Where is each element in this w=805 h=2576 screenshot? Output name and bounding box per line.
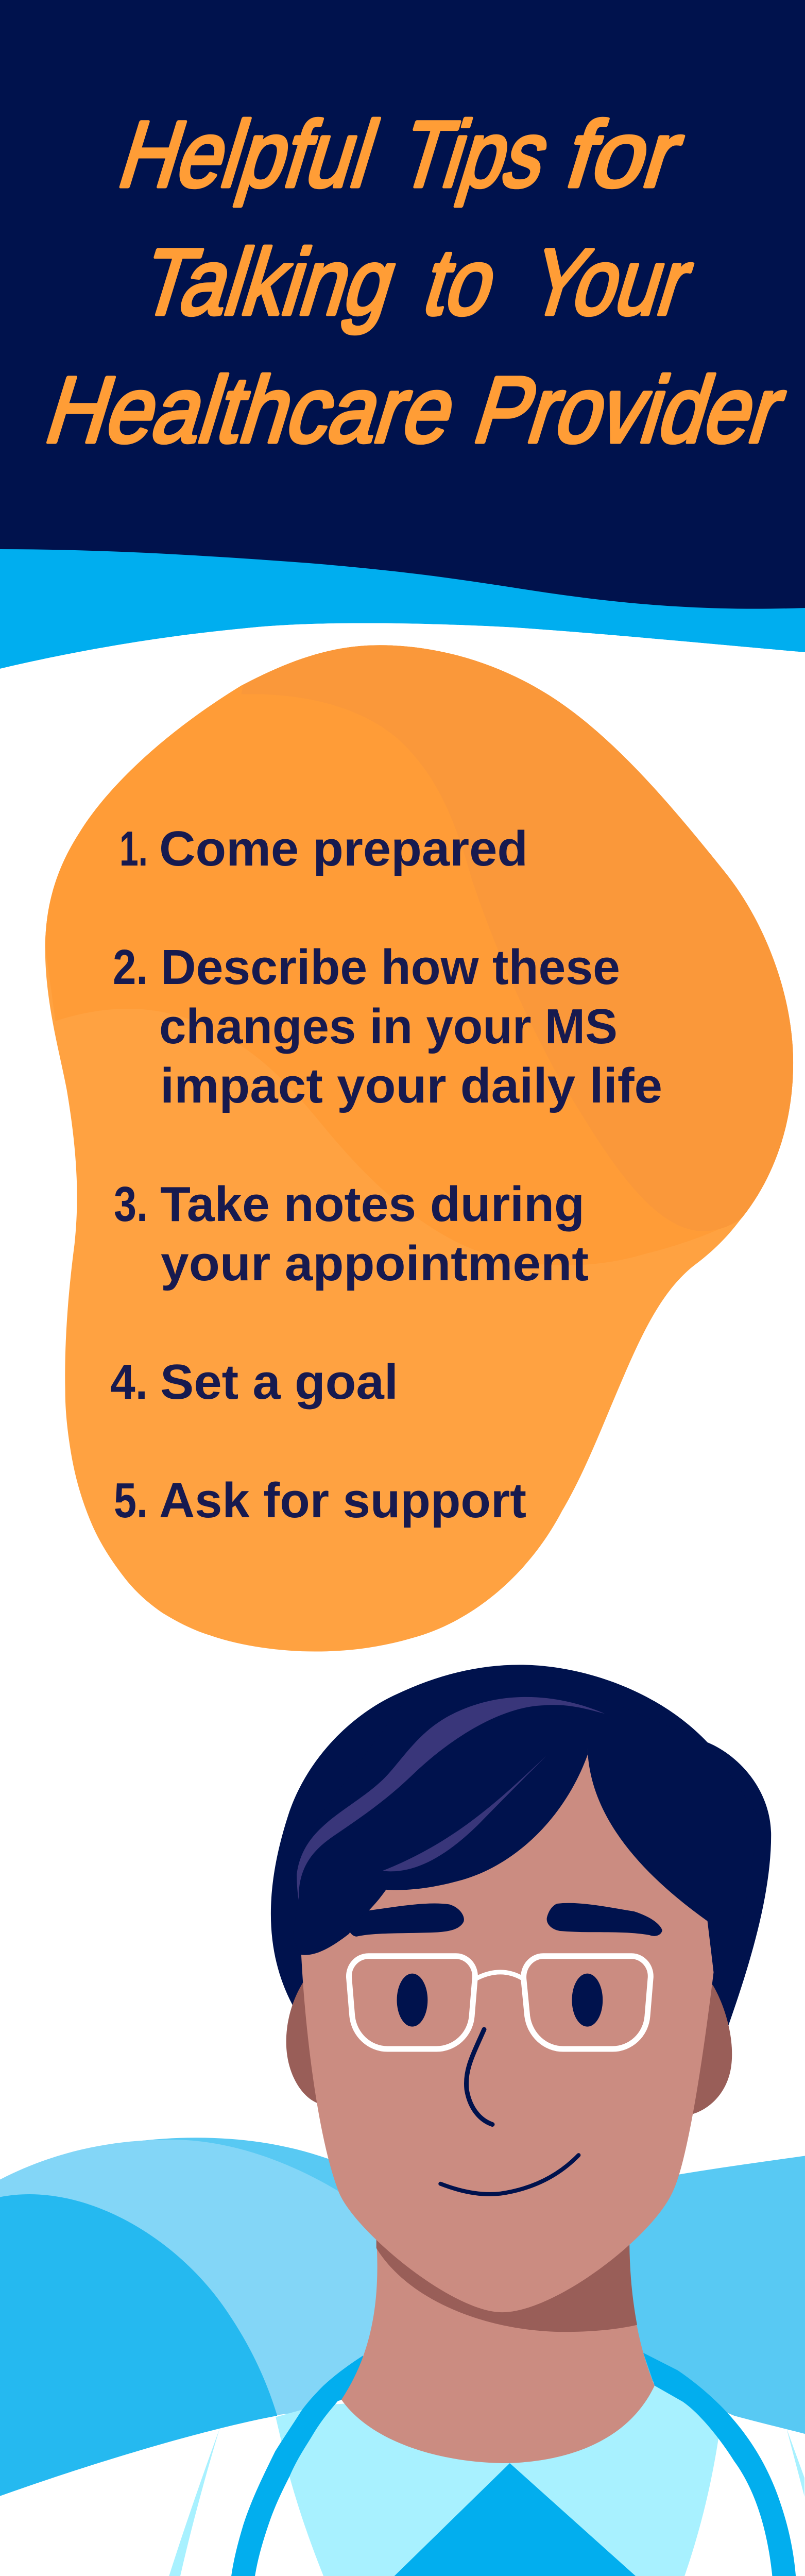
mouth [440, 2155, 578, 2194]
tips list [110, 821, 662, 1528]
blue wave divider [0, 549, 805, 669]
white area below header wave [0, 623, 805, 721]
neck [341, 2238, 655, 2463]
right eye [572, 1974, 603, 2027]
tip 3: Take notes during [160, 1177, 585, 1232]
right ear [683, 1985, 732, 2114]
left eye [397, 1974, 427, 2027]
background wave: pale blue [0, 2140, 390, 2415]
scrub V-neck [344, 2463, 673, 2576]
title: Your [518, 230, 705, 334]
back hair [271, 1665, 771, 2042]
title: Helpful [108, 102, 390, 207]
orange blob panel [0, 618, 805, 1652]
hair highlight upper [297, 1697, 605, 1900]
title: Healthcare [35, 358, 470, 462]
glasses [349, 1956, 650, 2049]
left coat fold [145, 2428, 220, 2576]
tip 2: Describe how these [161, 940, 620, 995]
title: Talking [130, 230, 410, 334]
tip 3: your appointment [161, 1236, 589, 1291]
neck shadow [376, 2238, 637, 2332]
right eyebrow [547, 1903, 662, 1936]
title: to [413, 230, 510, 334]
tip 1: 1. [119, 821, 148, 876]
left ear [286, 1982, 334, 2104]
hair highlight lower [383, 1756, 547, 1871]
tip 2 [113, 940, 662, 1113]
background wave: mid blue [0, 2138, 805, 2434]
front hair right [588, 1693, 760, 1972]
doctor illustration [0, 1665, 805, 2576]
title: Tips [389, 102, 562, 207]
background wave: bright blue [0, 2194, 277, 2496]
right coat fold [786, 2428, 804, 2497]
stethoscope right tube [643, 2353, 797, 2576]
nose [466, 2029, 492, 2124]
coat collar [276, 2384, 719, 2576]
tip 5: 5. [114, 1473, 148, 1528]
tip 5: Ask for support [159, 1473, 526, 1528]
tip 4: 4. [110, 1354, 148, 1410]
tip 2: impact your daily life [160, 1058, 662, 1113]
face [300, 1749, 714, 2312]
tip 3 [114, 1177, 589, 1291]
title [35, 102, 797, 462]
tip 2: changes in your MS [159, 999, 618, 1054]
tip 2: 2. [113, 940, 148, 995]
tip 3: 3. [114, 1177, 148, 1232]
left eyebrow [349, 1904, 464, 1937]
front hair fringe [293, 1693, 588, 1955]
tip 4: Set a goal [160, 1354, 398, 1410]
tip 1: Come prepared [159, 821, 528, 876]
title: for [555, 102, 695, 207]
header panel [0, 0, 805, 613]
stethoscope left tube [230, 2355, 370, 2576]
